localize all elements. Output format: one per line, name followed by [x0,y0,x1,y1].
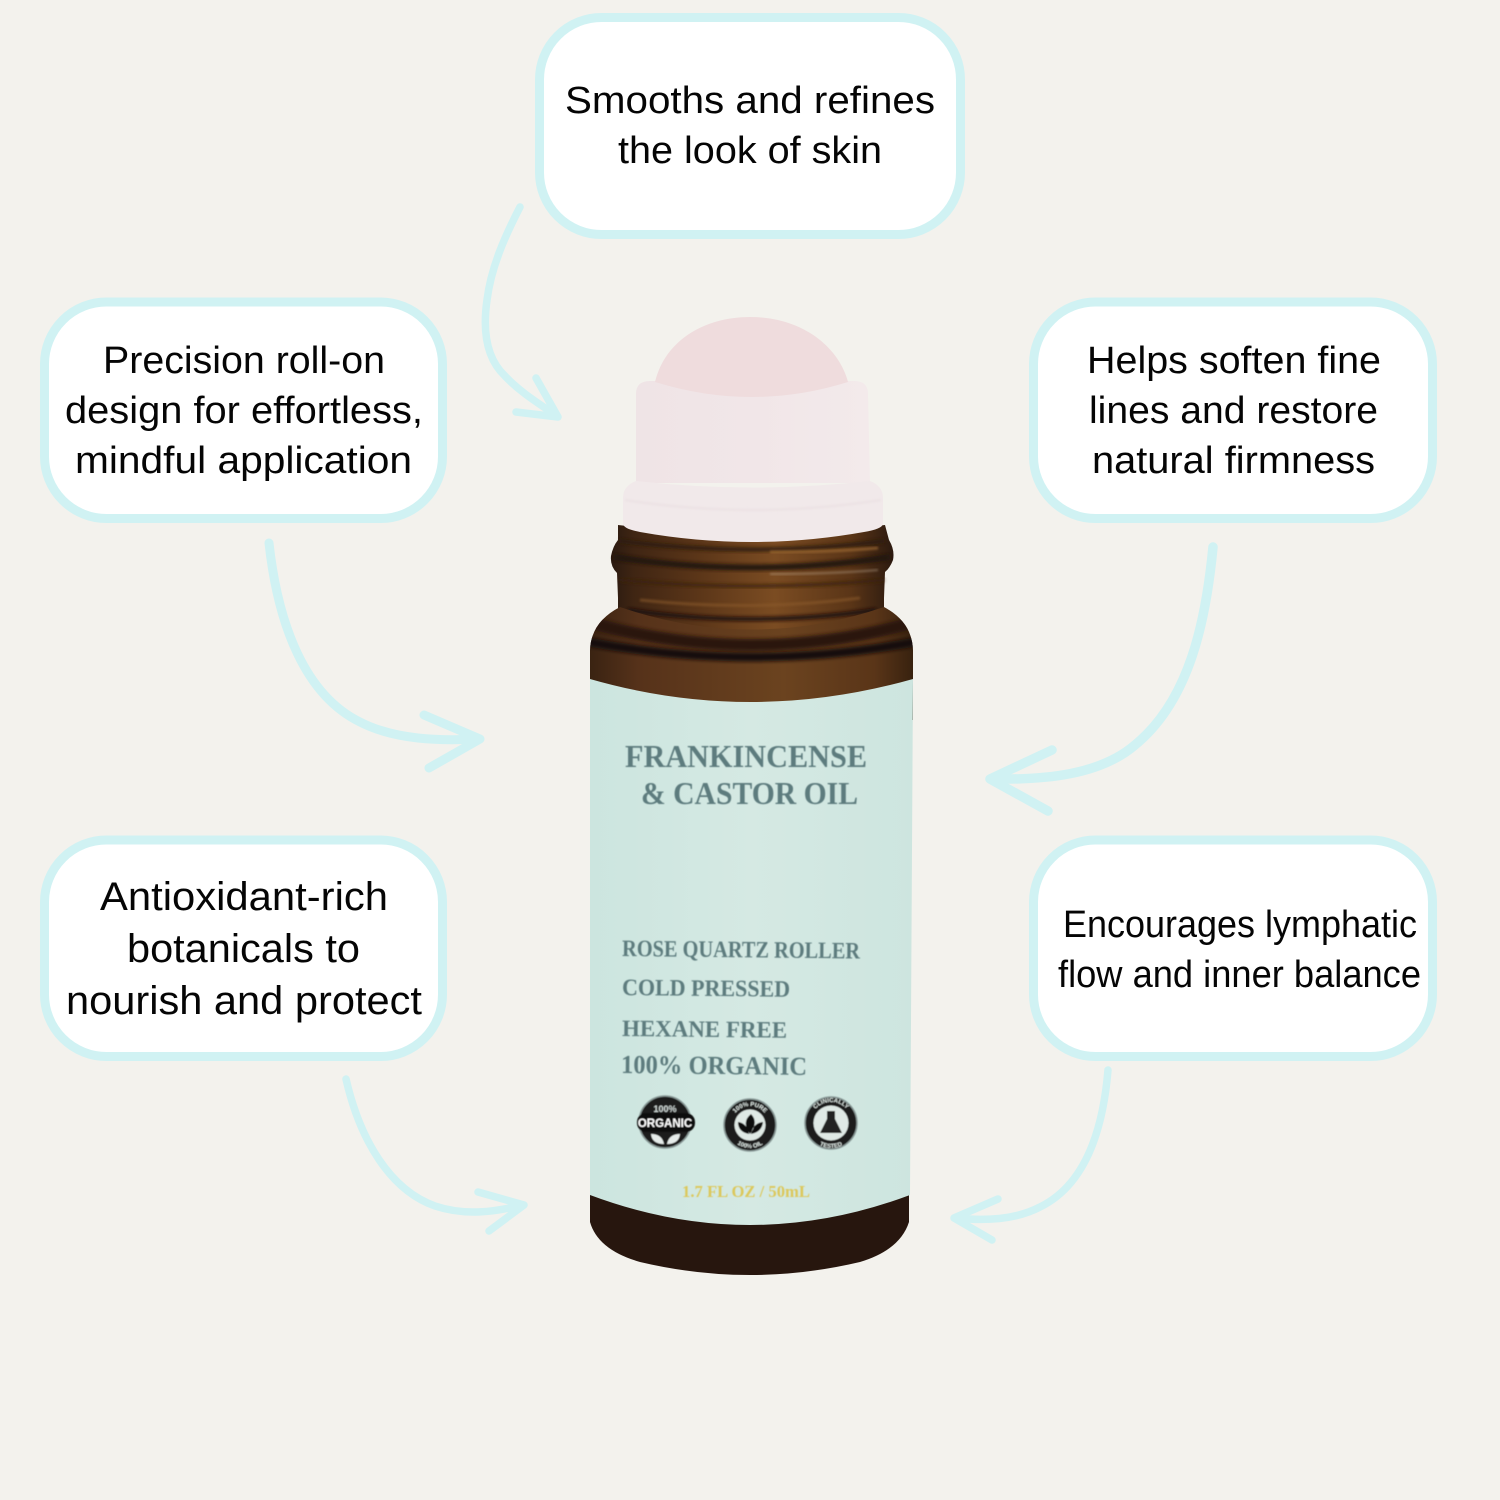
callout: precision roll-on: design for effortless, [65,390,423,432]
badge: leaf seal [722,1098,778,1152]
badge: clinically tested [804,1096,858,1150]
label text: claims: 100% ORGANIC [621,1050,807,1081]
arrow: precision callout to bottle [269,543,480,768]
badge: clinically tested: CLINICALLY [812,1097,850,1109]
badge: 100% organic: ORGANIC [638,1118,692,1130]
badge: 100% organic: 100% [653,1104,677,1114]
callout: antioxidant-rich botanicals [44,840,442,1056]
bottle neck with threads [611,525,894,650]
callout: encourages lymphatic flow: flow and inner balance [1058,954,1421,996]
bottle shoulder [588,600,915,720]
callout: encourages lymphatic flow: Encourages lymphatic [1063,904,1417,946]
arrow: antioxidant callout to bottle [346,1079,524,1231]
callout: helps soften fine lines: natural firmness [1092,440,1375,482]
callout: smooths and refines: Smooths and refines [565,80,935,122]
badge: clinically tested: TESTED [820,1140,842,1149]
callout: helps soften fine lines: Helps soften fine [1087,340,1381,382]
rose quartz ball [655,317,848,397]
label text: claims [621,936,861,1081]
callout: helps soften fine lines: lines and restore [1089,390,1378,432]
label text: claims: COLD PRESSED [622,975,790,1003]
callout: smooths and refines: the look of skin [618,130,882,172]
badge: leaf seal: 100% PURE [732,1101,768,1114]
callout: antioxidant-rich botanicals: Antioxidant-rich [100,875,388,919]
label [590,679,913,1225]
label text: claims: HEXANE FREE [622,1016,787,1044]
arrow: helps soften callout to bottle [990,547,1213,811]
callout: antioxidant-rich botanicals: nourish and protect [66,979,422,1023]
arrow: top callout to roller [485,207,558,417]
callout: precision roll-on [44,302,442,518]
label text: claims: ROSE QUARTZ ROLLER [622,936,861,965]
callout: precision roll-on: mindful application [75,440,412,482]
callout: antioxidant-rich botanicals: botanicals to [127,927,360,971]
label text: product name: FRANKINCENSE [625,738,867,774]
callout: helps soften fine lines [1034,302,1432,518]
callout: smooths and refines [540,18,960,234]
label text: volume: 1.7 FL OZ / 50mL [682,1182,810,1201]
bottle base [590,1180,909,1275]
product: roller bottle [590,317,913,1275]
arrow: encourages callout to bottle [954,1070,1108,1240]
roller collar [623,381,883,542]
label text: product name: & CASTOR OIL [641,775,858,811]
badge: 100% organic [637,1096,695,1148]
callout: encourages lymphatic flow [1034,840,1432,1056]
label text: product name [625,738,867,811]
callout: precision roll-on: Precision roll-on [103,340,385,382]
badge: leaf seal: 100% OIL [736,1140,764,1149]
